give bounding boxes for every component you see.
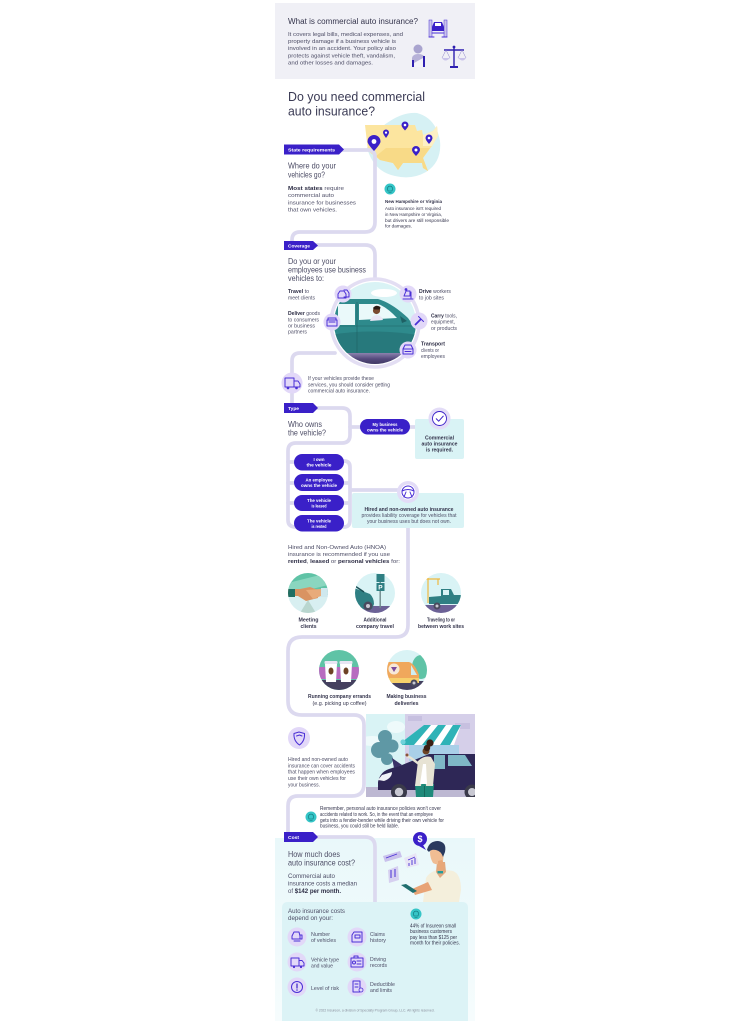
callout: New Hampshire or Virginia	[385, 199, 449, 230]
icon: deductible and limits	[348, 978, 366, 996]
text: median cost	[288, 873, 358, 895]
label: vehicle type and value: and value	[311, 964, 333, 970]
label: making business deliveries	[386, 694, 427, 707]
label: meeting clients	[298, 618, 318, 630]
illustration: coffee errands	[319, 650, 359, 690]
label: meeting clients: clients	[300, 624, 317, 630]
text: travel: meet clients	[288, 296, 315, 302]
callout: commercial auto insurance is required	[415, 419, 464, 459]
icon: tip bulb	[306, 812, 316, 822]
icon: scales of justice	[442, 46, 466, 67]
text: deliver: to consumers	[288, 317, 319, 323]
label: traveling to or between work sites: Traveling to or	[427, 618, 456, 624]
text: remember personal auto policies: Remember, personal auto insurance policies won't cover	[320, 806, 441, 812]
label: claims history: history	[370, 938, 386, 944]
label: claims history: Claims	[370, 932, 385, 938]
heading: do you or your employees use business vehicles	[288, 257, 366, 283]
text: drive: Drive workers	[419, 289, 451, 295]
callout: hired and non-owned auto insurance	[352, 493, 464, 528]
icon: shield	[288, 727, 310, 749]
icon: drive workers	[400, 286, 416, 302]
text: HNOA recommendation: rented , leased or personal vehicles for:	[288, 559, 400, 565]
callout: commercial auto insurance is required: is required.	[426, 448, 453, 454]
text: transport: clients or	[421, 348, 439, 354]
text block: definition	[288, 32, 403, 66]
heading: who owns the vehicle	[288, 420, 327, 438]
tag: state requirements: State requirements	[288, 148, 335, 154]
heading: who owns the vehicle: Who owns	[288, 420, 322, 429]
illustration: additional company travel: P	[378, 584, 383, 592]
tag: type: Type	[288, 406, 299, 412]
text block: where do your vehicles go: that own vehicles.	[288, 207, 337, 213]
icon: number of vehicles	[288, 928, 306, 946]
label: deductible and limits: Deductible	[370, 982, 395, 988]
tag: type	[284, 403, 318, 413]
icon: claims history	[348, 928, 366, 946]
callout: New Hampshire or Virginia: Auto insurance isn't required	[385, 206, 441, 212]
icon: stat bulb	[410, 908, 422, 920]
text: HNOA recommendation: insurance is recommended if you use	[288, 552, 390, 558]
pills: vehicle ownership options: the vehicle	[306, 463, 332, 469]
text: remember personal auto policies: gets into a fender-bender while driving their own vehicle for	[320, 818, 444, 824]
illustration: delivery van	[386, 650, 430, 690]
text: carry: or products	[431, 326, 457, 332]
pills: vehicle ownership options: I own	[314, 457, 325, 463]
icon: car on lift	[429, 20, 447, 37]
icon: travel to meet clients	[334, 286, 352, 302]
text: median cost: of $142 per month.	[288, 888, 341, 895]
text: remember personal auto policies: accidents related to work. So, in the event that an employee	[320, 812, 433, 818]
text: drive	[419, 289, 451, 302]
text: auto insurance costs depend on your: Auto insurance costs	[288, 909, 345, 915]
text: consider commercial auto insurance: services, you should consider getting	[308, 382, 390, 388]
tag: coverage: Coverage	[288, 244, 310, 250]
tag: state requirements	[284, 144, 344, 154]
text block: definition: It covers legal bills, medical expenses, and	[288, 32, 403, 38]
icon: deliver goods	[324, 314, 340, 330]
label: number of vehicles	[311, 932, 336, 944]
label: making business deliveries: deliveries	[394, 701, 419, 707]
heading: do you need commercial auto insurance: Do you need commercial	[288, 89, 425, 104]
text: HNOA recommendation	[288, 545, 400, 565]
tag: cost: Cost	[288, 835, 299, 841]
flow track connecting all sections	[288, 150, 415, 905]
label: traveling to or between work sites: between work sites	[418, 624, 464, 630]
callout: commercial auto insurance is required: Commercial	[425, 436, 454, 442]
text block: where do your vehicles go: insurance for businesses	[288, 200, 356, 206]
pills: vehicle ownership options: is leased	[312, 504, 327, 510]
callout: hired and non-owned auto insurance: your business uses but does not own.	[367, 519, 451, 525]
label: driving records	[370, 957, 387, 969]
text: HNOA recommendation: Hired and Non-Owned Auto (HNOA)	[288, 545, 386, 551]
pills: vehicle ownership options: The vehicle	[307, 518, 331, 524]
text: carry: equipment,	[431, 320, 455, 326]
label: additional company travel: company travel	[356, 624, 394, 630]
icon: vehicle type and value	[288, 952, 306, 972]
text: 44% of Insureon customers: month for their policies.	[410, 940, 460, 946]
text: consider commercial auto insurance: If your vehicles provide these	[308, 376, 374, 382]
text: auto insurance costs depend on your: depend on your:	[288, 916, 333, 922]
pill: my business owns the vehicle: My business	[372, 422, 398, 428]
pills: vehicle ownership options	[294, 454, 344, 532]
icon: injured person	[412, 44, 425, 67]
text block: where do your vehicles go: Where do your	[288, 162, 336, 170]
text: median cost: Commercial auto	[288, 873, 336, 880]
text: transport: Transport	[421, 342, 445, 348]
callout: New Hampshire or Virginia: in New Hampshire or Virginia,	[385, 212, 442, 218]
text: hired and non-owned coverage for accidents: insurance can cover accidents	[288, 763, 355, 769]
text: hired and non-owned coverage for accidents: use their own vehicles for	[288, 776, 346, 782]
pill: my business owns the vehicle: owns the vehicle	[367, 428, 403, 434]
text: 44% of Insureon customers: business customers	[410, 929, 452, 935]
text block: definition: involved in an accident. Your policy also	[288, 46, 396, 52]
map of the United States with pins	[365, 113, 440, 177]
text block: definition: protects against vehicle theft, vandalism,	[288, 53, 395, 59]
text: median cost: insurance costs a median	[288, 880, 358, 888]
label: number of vehicles: of vehicles	[311, 938, 336, 944]
label: number of vehicles: Number	[311, 932, 330, 938]
callout: commercial auto insurance is required: auto insurance	[422, 442, 458, 448]
illustration: additional company travel	[354, 573, 395, 613]
text block: definition: and other losses and damages.	[288, 60, 373, 66]
label: vehicle type and value: Vehicle type	[311, 958, 339, 964]
callout: New Hampshire or Virginia: for damages.	[385, 224, 412, 230]
text: 44% of Insureon customers: pay less than $125 per	[410, 935, 457, 941]
panel: what is commercial auto insurance	[275, 3, 475, 79]
pill: my business owns the vehicle	[360, 419, 410, 434]
text block: definition: property damage if a business vehicle is	[288, 39, 396, 45]
text: remember personal auto policies	[320, 806, 444, 830]
text: 44% of Insureon customers	[410, 924, 460, 946]
label: deductible and limits	[370, 982, 395, 994]
text: hired and non-owned coverage for accidents: that happen when employees	[288, 770, 355, 776]
label: running company errands	[308, 694, 371, 707]
text: consider commercial auto insurance: commercial auto insurance.	[308, 388, 370, 394]
label: additional company travel	[356, 618, 394, 630]
pills: vehicle ownership options: owns the vehicle	[301, 483, 337, 489]
icon: transport clients	[400, 342, 416, 358]
label: traveling to or between work sites	[418, 618, 464, 630]
callout: New Hampshire or Virginia: but drivers are still responsible	[385, 218, 449, 224]
pills: vehicle ownership options: An employee	[306, 478, 333, 484]
text: carry	[431, 314, 457, 332]
text block: where do your vehicles go: Most states require	[288, 186, 344, 192]
callout: New Hampshire or Virginia: New Hampshire or Virginia	[385, 199, 442, 205]
illustration: woman beside broken-down car with storefront	[366, 714, 475, 797]
text: carry: Carry tools,	[431, 314, 457, 320]
text: remember personal auto policies: business, you could still be held liable.	[320, 824, 399, 830]
heading: do you need commercial auto insurance: auto insurance?	[288, 104, 375, 118]
heading: who owns the vehicle: the vehicle?	[288, 428, 327, 438]
heading: how much does auto insurance cost: auto insurance cost?	[288, 858, 356, 868]
text: travel	[288, 289, 315, 302]
heading: do you need commercial auto insurance	[288, 89, 425, 118]
heading: do you or your employees use business vehicles: Do you or your	[288, 257, 336, 266]
text: travel: Travel to	[288, 289, 309, 295]
pills: vehicle ownership options: The vehicle	[307, 498, 331, 504]
text block: where do your vehicles go: commercial auto	[288, 193, 334, 199]
text: transport: employees	[421, 354, 445, 360]
text: hired and non-owned coverage for accidents: your business.	[288, 782, 320, 788]
heading: do you or your employees use business vehicles: vehicles to:	[288, 274, 324, 283]
label: claims history	[370, 932, 386, 944]
icon: small map pins	[383, 122, 432, 156]
icon: check mark	[428, 408, 450, 430]
label: additional company travel: Additional	[364, 618, 387, 624]
map pins	[368, 122, 432, 156]
text: transport	[421, 342, 445, 360]
label: deductible and limits: and limits	[370, 988, 392, 994]
text block: where do your vehicles go	[288, 162, 356, 213]
illustration: driver in teal car	[330, 279, 420, 370]
tag: cost	[284, 832, 318, 842]
icon: large map pin	[368, 135, 380, 151]
label: meeting clients: Meeting	[298, 618, 318, 624]
callout: hired and non-owned auto insurance: provides liability coverage for vehicles that	[362, 513, 457, 519]
text: auto insurance costs depend on your	[288, 909, 345, 922]
text: deliver: or business	[288, 324, 315, 330]
icon: delivery truck	[282, 372, 302, 394]
icon: carry tools	[410, 312, 428, 330]
text block: where do your vehicles go: vehicles go?	[288, 170, 326, 180]
label: driving records: records	[370, 963, 387, 969]
illustration: meeting clients handshake	[288, 573, 328, 613]
label: driving records: Driving	[370, 957, 386, 963]
icon: light bulb tip	[384, 184, 396, 194]
heading: how much does auto insurance cost: How much does	[288, 850, 340, 859]
label: making business deliveries: Making business	[386, 694, 427, 700]
label: running company errands: (e.g. picking up coffee)	[312, 701, 367, 707]
footer: copyright: © 2022 Insureon, a division of Specialty Program Group, LLC. All rights reserved.	[316, 1008, 435, 1012]
icon: dollar bubble: $	[417, 834, 423, 844]
label: running company errands: Running company errands	[308, 694, 371, 700]
text: deliver	[288, 311, 320, 336]
text: 44% of Insureon customers: 44% of Insureon small	[410, 924, 456, 930]
icon: level of risk	[288, 978, 306, 996]
label: vehicle type and value	[311, 958, 339, 970]
text: drive: to job sites	[419, 296, 444, 302]
heading: how much does auto insurance cost	[288, 850, 356, 868]
label: level of risk: Level of risk	[311, 986, 339, 992]
text: hired and non-owned coverage for accidents: Hired and non-owned auto	[288, 757, 348, 763]
text: hired and non-owned coverage for accidents	[288, 757, 355, 788]
tag: coverage	[284, 241, 318, 250]
panel: costs depend on	[282, 902, 468, 1021]
text: consider commercial auto insurance	[308, 376, 390, 394]
panel: cost section background	[275, 838, 475, 1021]
icon: floating documents and charts	[383, 851, 419, 883]
heading: do you or your employees use business vehicles: employees use business	[288, 266, 366, 274]
text: deliver: partners	[288, 330, 307, 336]
text: deliver: Deliver goods	[288, 311, 320, 317]
illustration: traveling to work sites	[421, 573, 461, 613]
icon: driving records	[348, 952, 366, 972]
heading: what is commercial auto insurance: What is commercial auto insurance?	[288, 17, 419, 26]
callout: hired and non-owned auto insurance: Hired and non-owned auto insurance	[364, 507, 454, 513]
icon: steering wheel	[397, 481, 419, 503]
pills: vehicle ownership options: is rented	[312, 524, 327, 530]
illustration: man with phone and cost documents	[383, 832, 461, 902]
